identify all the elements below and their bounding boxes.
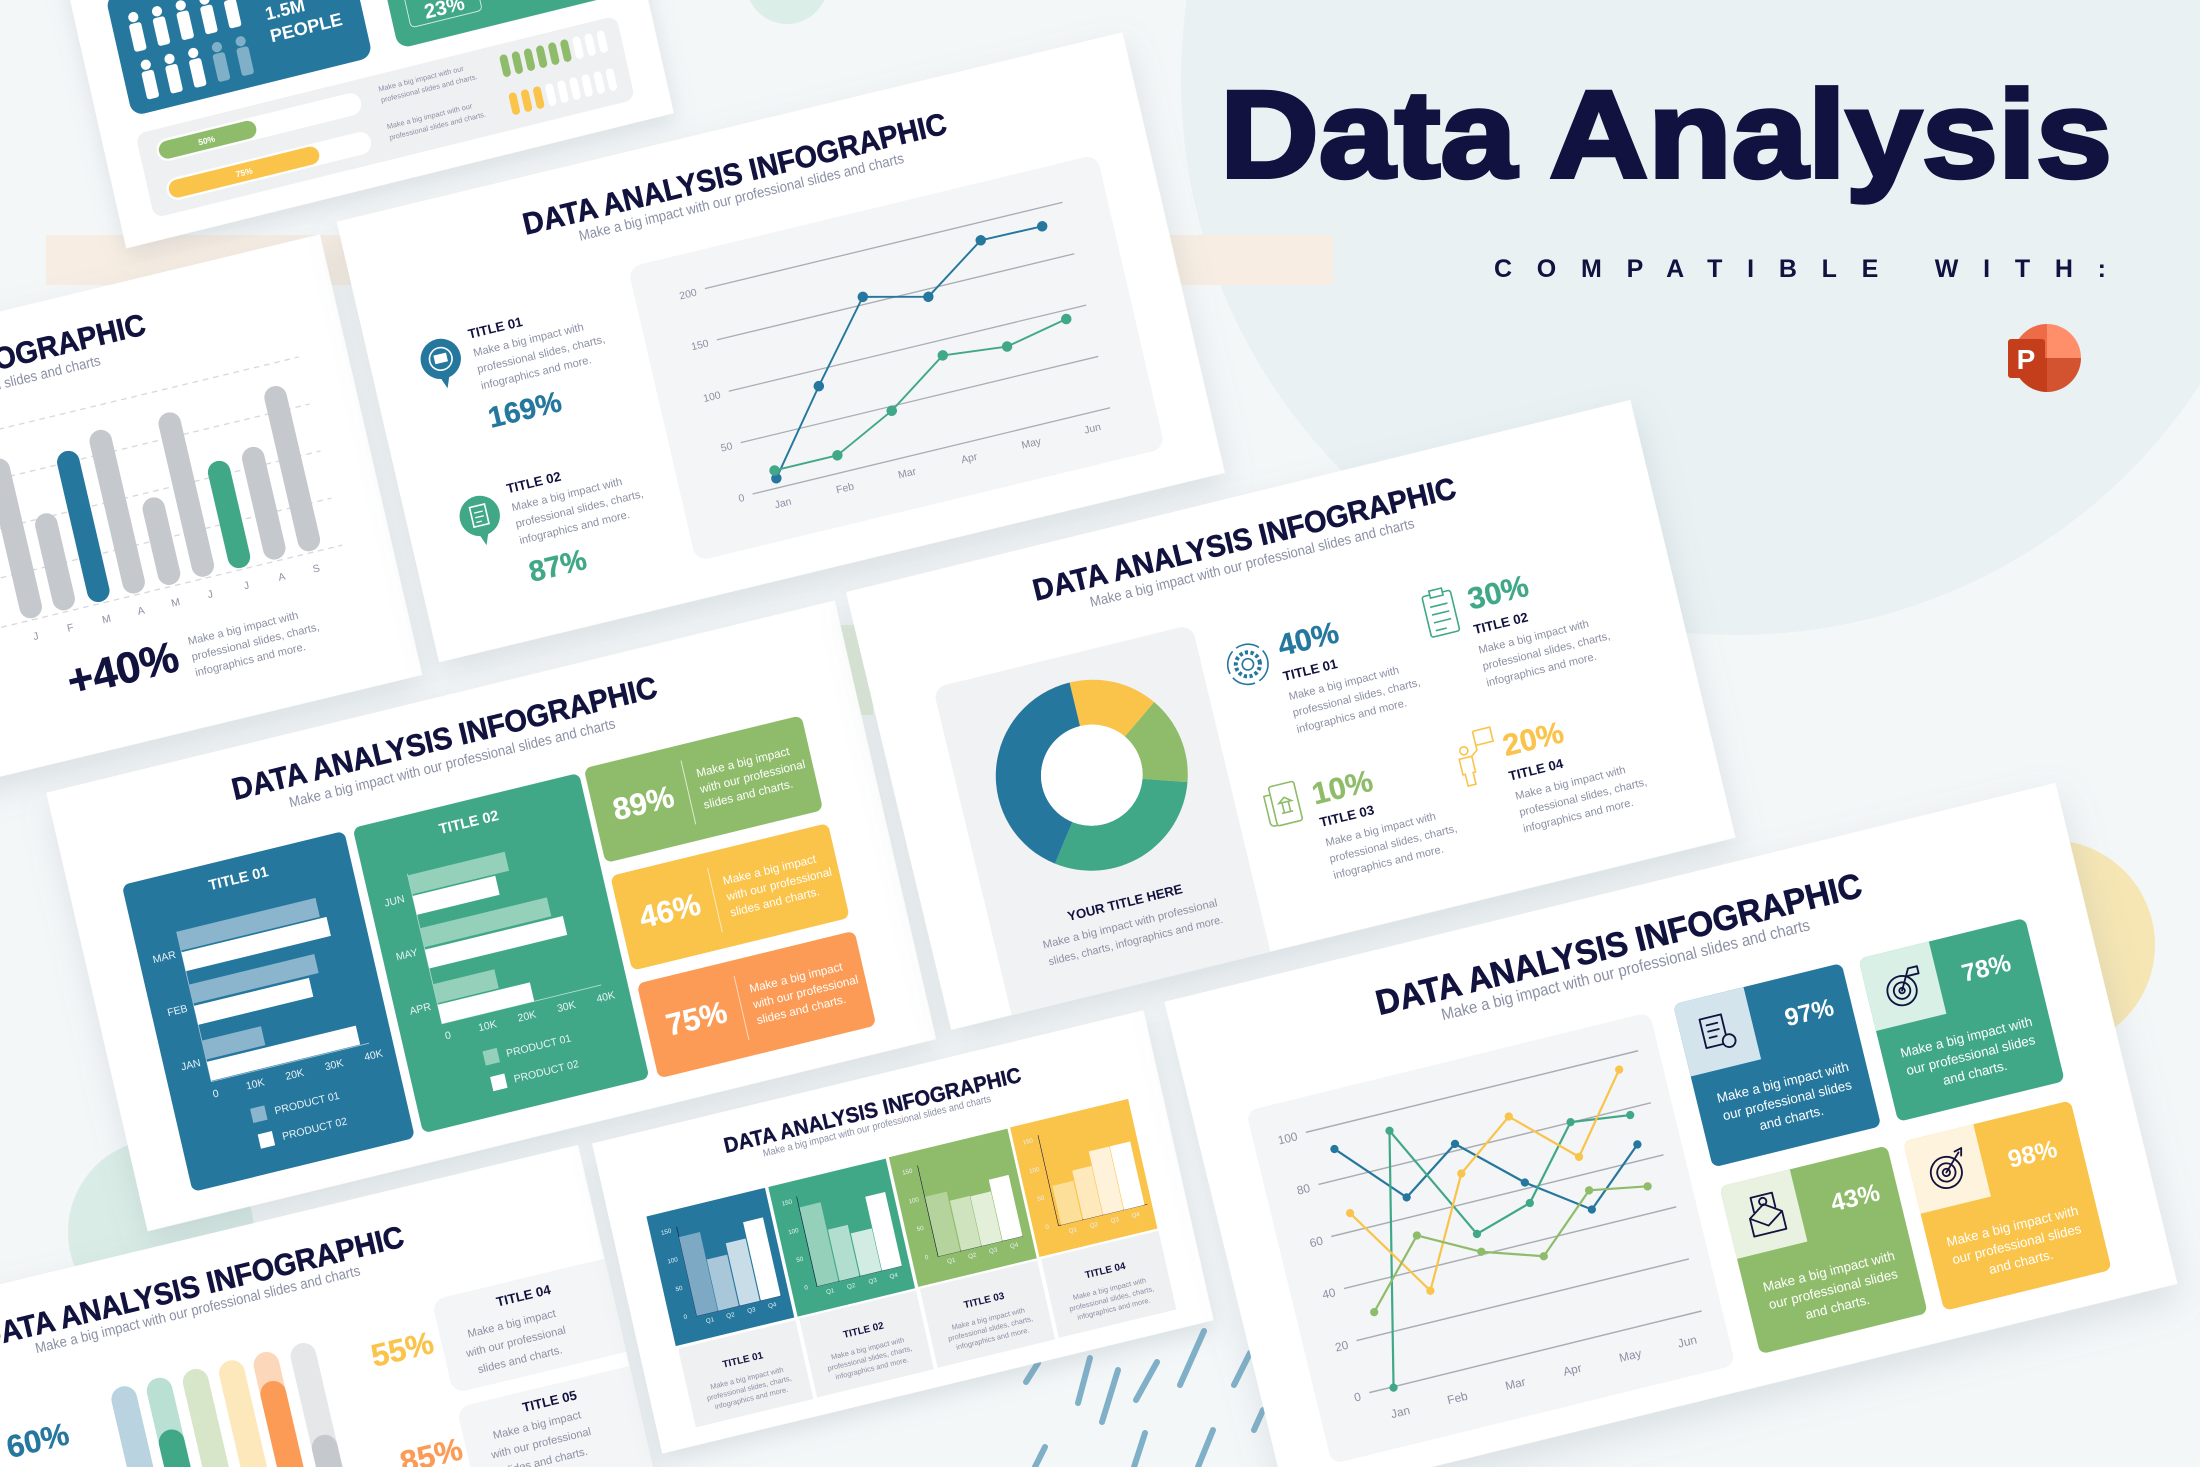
card: 46%: Make a big impact [722, 853, 818, 888]
item: 30% [1463, 553, 1615, 689]
cell: title 02: infographics and more. [835, 1355, 910, 1381]
panel: yellow chart: 0 [1045, 1223, 1050, 1231]
line chart: Mar [897, 466, 918, 481]
card: 75%: with our professional [751, 973, 860, 1012]
text: title 01: infographics and more. [480, 354, 593, 392]
panel: title 02 chart: 20K [516, 1009, 537, 1025]
item: 40%: Make a big impact with [1288, 665, 1400, 703]
panel: people count: PEOPLE [268, 9, 344, 46]
item: 10%: infographics and more. [1332, 843, 1445, 882]
panel: title 01 chart: 20K [284, 1067, 305, 1083]
people icons [126, 0, 254, 100]
icon: mail [1745, 1191, 1786, 1237]
series: green [750, 313, 1090, 477]
card: title 05: Make a big impact [492, 1409, 582, 1442]
card: 78%: and charts. [1941, 1058, 2009, 1088]
item: 40% [1272, 599, 1426, 736]
line chart: 0 [1353, 1389, 1363, 1405]
panel: title 02 chart: TITLE 02 [438, 808, 500, 838]
legend: PRODUCT 02 [513, 1058, 580, 1086]
panel: green chart: 150 [902, 1167, 914, 1177]
item: 40%: professional slides, charts, [1292, 677, 1422, 720]
cell: title 01: TITLE 01 [722, 1350, 765, 1371]
item: 10%: 10% [1309, 764, 1376, 811]
line chart: Jan [774, 497, 793, 511]
pale green band [835, 625, 873, 715]
text: title 01: 169% [485, 386, 565, 435]
line chart: 80 [1295, 1181, 1312, 1198]
item: 20%: Make a big impact with [1514, 764, 1627, 803]
item: 20%: infographics and more. [1522, 797, 1635, 835]
line chart: May [1021, 436, 1043, 452]
card: 75%: 75% [663, 994, 730, 1043]
card: 46% [610, 823, 850, 971]
panel: title 01 chart: 40K [363, 1048, 384, 1064]
legend: PRODUCT 01 [273, 1090, 341, 1117]
heading: Make a big impact with our professional slides and charts [577, 151, 906, 245]
card: 43%: and charts. [1804, 1292, 1871, 1322]
line chart [628, 154, 1165, 561]
bar chart: M [101, 614, 112, 626]
text: title 02 [505, 451, 658, 590]
panel: title 01 chart: 0 [212, 1088, 220, 1101]
pill meters [499, 30, 618, 116]
card: title 04: slides and charts. [477, 1344, 564, 1376]
slide: quarterly bar panels [592, 1010, 1214, 1454]
panel: teal chart: Q3 [868, 1277, 878, 1286]
panel: title 02 chart [353, 773, 649, 1133]
peach band [46, 235, 1333, 285]
bar chart: J [32, 631, 40, 643]
stat: 55%: 55% [368, 1325, 437, 1374]
line chart: Apr [1562, 1361, 1583, 1379]
card: 43%: 43% [1828, 1179, 1883, 1217]
card: title 05: with our professional [489, 1426, 592, 1462]
cell: title 04: Make a big impact with [1072, 1276, 1147, 1302]
item: 10%: Make a big impact with [1324, 811, 1437, 849]
bar chart: A [137, 606, 146, 618]
panel: progress: professional slides and charts. [380, 72, 478, 105]
card: 97% [1673, 963, 1881, 1167]
card: 89%: with our professional [698, 758, 807, 796]
line chart: 100 [702, 390, 722, 405]
blue dash pattern [1026, 1331, 1263, 1467]
cell: title 04: infographics and more. [1076, 1295, 1151, 1322]
panel: blue chart: Q1 [705, 1316, 715, 1325]
cell: title 02: TITLE 02 [842, 1320, 885, 1341]
card: 43%: Make a big impact with [1761, 1248, 1896, 1295]
card: title 04: Make a big impact [467, 1308, 557, 1341]
cell: title 01: professional slides, charts, [706, 1373, 792, 1403]
panel: progress: professional slides and charts. [388, 110, 487, 142]
heading: DATA ANALYSIS INFOGRAPHIC [722, 1063, 1023, 1158]
card: 78%: 78% [1959, 950, 2014, 988]
line chart: Apr [960, 452, 979, 466]
panel: donut: slides, charts, infographics and more. [1047, 914, 1224, 968]
cell: title 01: Make a big impact with [710, 1365, 784, 1391]
line chart: 200 [679, 288, 698, 302]
panel: donut: YOUR TITLE HERE [1066, 881, 1184, 924]
icon: PowerPoint: P [2017, 344, 2035, 375]
panel: blue chart: Q4 [768, 1301, 778, 1310]
item: 40%: TITLE 01 [1281, 656, 1339, 684]
line chart: Feb [1446, 1389, 1469, 1407]
text: title 01: professional slides, charts, [476, 334, 606, 376]
cell: title 03: infographics and more. [955, 1325, 1030, 1352]
card: title 04: with our professional [464, 1324, 567, 1360]
slide: horizontal bars and cards [46, 600, 936, 1231]
panel: progress [135, 16, 635, 218]
line chart: Jan [1389, 1403, 1411, 1421]
panel: blue chart: Q2 [726, 1311, 736, 1320]
heading: Make a big impact with our professional slides and charts [288, 716, 617, 811]
cell: title 03: Make a big impact with [951, 1305, 1026, 1332]
card: 89% [584, 715, 823, 863]
bar chart: J [207, 589, 214, 601]
cell: title 02 [799, 1290, 934, 1398]
panel: teal chart: Q2 [846, 1282, 857, 1291]
icon: blue pin [417, 335, 467, 393]
icon: green pin [456, 492, 506, 550]
panel: blue chart: 50 [675, 1285, 684, 1293]
panel: title 01 chart: 30K [324, 1057, 345, 1073]
item: 30%: 30% [1464, 569, 1532, 617]
card: 98%: Make a big impact with [1945, 1203, 2080, 1250]
legend: PRODUCT 02 [281, 1115, 349, 1143]
icon: clipboard [1421, 586, 1460, 637]
icon: person with flag [1454, 727, 1502, 787]
cell: title 02: Make a big impact with [830, 1335, 905, 1362]
item: 20%: professional slides, charts, [1518, 776, 1648, 819]
line chart: Mar [1504, 1375, 1527, 1393]
panel: title 01 chart: FEB [166, 1003, 189, 1019]
heading: DATA ANALYSIS INFOGRAPHIC [1030, 471, 1459, 608]
text: title 02: 87% [526, 544, 590, 589]
text: title 02: Make a big impact with [511, 476, 623, 514]
line chart: Feb [835, 481, 855, 496]
card: 98%: 98% [2005, 1136, 2060, 1174]
heading: Make a big impact with our professional slides and charts [762, 1094, 992, 1160]
bar chart: F [66, 623, 75, 635]
item: 20%: TITLE 04 [1507, 756, 1565, 784]
stat: +40%: +40% [63, 633, 183, 706]
panel: people count [105, 0, 373, 116]
panel: green chart: Q2 [967, 1252, 978, 1260]
slide: monthly capsule bars [0, 234, 422, 864]
panel: progress: Make a big impact with our [377, 64, 465, 94]
capsule chart [109, 1340, 382, 1467]
cell: title 03: TITLE 03 [963, 1291, 1006, 1311]
heading: Make a big impact with our professional slides and charts [1440, 916, 1812, 1024]
text: title 02: infographics and more. [518, 509, 631, 547]
line chart: 100 [1276, 1129, 1299, 1148]
series: blue [729, 219, 1090, 485]
panel: yellow chart: Q4 [1131, 1211, 1141, 1220]
panel: green chart: 0 [924, 1254, 930, 1262]
line chart: 20 [1334, 1338, 1350, 1355]
panel: donut: Make a big impact with professional [1042, 897, 1219, 951]
text: title 02: professional slides, charts, [514, 488, 645, 531]
panel: title 02 chart: 30K [556, 999, 577, 1015]
card: title 04: TITLE 04 [495, 1282, 553, 1310]
panel: yellow chart: Q1 [1068, 1226, 1078, 1235]
panel: green chart: 50 [916, 1225, 925, 1233]
card: 43%: our professional slides [1767, 1266, 1900, 1312]
panel: green chart: Q4 [1009, 1241, 1020, 1250]
heading: Make a big impact with our professional slides and charts [34, 1263, 362, 1357]
panel: teal chart: 50 [796, 1256, 805, 1264]
stat: 60%: 60% [3, 1416, 72, 1465]
panel: green chart: Q1 [947, 1257, 957, 1265]
subtitle: compatible with: COMPATIBLE WITH: [1494, 255, 2106, 283]
card: 46%: with our professional [724, 866, 833, 904]
icon: document clock [1700, 1012, 1737, 1053]
card: 43% [1719, 1145, 1928, 1354]
legend [250, 1087, 349, 1149]
panel: yellow chart: 100 [1029, 1166, 1041, 1175]
panel: title 01 chart [122, 831, 415, 1192]
card: 78%: our professional slides [1905, 1032, 2037, 1078]
card: 97%: our professional slides [1721, 1077, 1853, 1123]
panel: title 02 chart: MAY [395, 947, 419, 963]
item: 10% [1309, 747, 1462, 882]
card: title 05 [457, 1366, 653, 1467]
panel: title 02 chart: APR [408, 1001, 433, 1018]
panel: progress: 75% [235, 165, 254, 179]
card: 97%: 97% [1782, 994, 1837, 1032]
card: 78%: Make a big impact with [1899, 1014, 2034, 1061]
item: 20% [1498, 699, 1652, 836]
panel: title 01 chart: 10K [245, 1076, 266, 1093]
panel: yellow chart: Q2 [1089, 1221, 1099, 1230]
card: 98%: and charts. [1987, 1247, 2055, 1277]
text block: Make a big impact with [187, 610, 300, 648]
series: teal [1329, 1069, 1685, 1393]
line chart: 40 [1321, 1285, 1337, 1302]
card: 46%: 46% [636, 886, 704, 935]
series: yellow [1327, 1065, 1664, 1310]
bar chart: S [312, 563, 321, 576]
card: 75%: Make a big impact [748, 960, 845, 996]
panel: green chart [889, 1129, 1037, 1287]
item: 20%: 20% [1500, 715, 1567, 763]
bar chart: A [277, 572, 287, 584]
panel: yellow chart: 150 [1022, 1137, 1034, 1147]
panel: yellow chart: Q3 [1110, 1216, 1120, 1225]
panel: teal chart: 0 [804, 1284, 809, 1292]
card: 89%: 89% [609, 779, 677, 827]
panel: teal chart: Q4 [889, 1272, 899, 1281]
panel: progress: 50% [197, 133, 216, 147]
text: title 01: Make a big impact with [472, 321, 585, 360]
item: 30%: infographics and more. [1485, 651, 1598, 689]
slide: multi-line chart and cards [1164, 783, 2177, 1467]
panel: 23 percent [372, 0, 616, 49]
panel: blue chart [646, 1188, 794, 1346]
item: 30%: professional slides, charts, [1481, 630, 1611, 673]
heading: DATA ANALYSIS INFOGRAPHIC [1372, 866, 1866, 1023]
icon: gear [1224, 640, 1272, 689]
panel: title 01 chart: TITLE 01 [207, 864, 270, 894]
item: 40%: infographics and more. [1296, 697, 1408, 736]
card: 98%: our professional slides [1951, 1221, 2083, 1267]
panel: teal chart: Q1 [825, 1287, 836, 1296]
cell: title 04: professional slides, charts, [1068, 1284, 1155, 1313]
icon: bullseye [1926, 1148, 1970, 1191]
line chart: 0 [738, 493, 746, 505]
line chart [1246, 1012, 1736, 1464]
icon: PowerPoint [2008, 324, 2081, 392]
icon: target flag [1883, 966, 1925, 1008]
panel: blue chart: 0 [683, 1313, 688, 1321]
item: 30%: TITLE 02 [1472, 609, 1529, 637]
cell: title 01: infographics and more. [714, 1385, 789, 1411]
line chart: 60 [1308, 1233, 1325, 1250]
line chart: Jun [1083, 422, 1102, 437]
panel: donut [933, 624, 1270, 1015]
slide: donut chart [846, 400, 1736, 1030]
panel: title 01 chart: JAN [180, 1057, 202, 1073]
cell: title 04 [1041, 1231, 1176, 1338]
yellow circle right [1945, 840, 2155, 1050]
card: title 04 [432, 1259, 626, 1394]
panel: blue chart: 150 [660, 1228, 673, 1237]
mint circle bottom left [68, 1139, 254, 1325]
bar chart: M [170, 597, 181, 610]
panel: green chart: Q3 [988, 1246, 999, 1255]
panel: blue chart: Q3 [747, 1306, 757, 1315]
card: title 05: TITLE 05 [521, 1387, 579, 1415]
panel: teal chart: 150 [781, 1198, 793, 1208]
card: 89%: slides and charts. [702, 777, 794, 812]
heading: DATA ANALYSIS INFOGRAPHIC [228, 669, 660, 807]
main title: Data Analysis [1220, 66, 2112, 204]
cell: title 03 [920, 1260, 1055, 1368]
text: title 02: TITLE 02 [505, 469, 562, 496]
heading: Make a big impact with our professional slides and charts [1088, 516, 1416, 611]
panel: title 02 chart: 10K [477, 1018, 498, 1034]
mint circle top [746, 0, 828, 24]
cell: title 04: TITLE 04 [1084, 1261, 1127, 1281]
panel: title 02 chart: 0 [444, 1029, 452, 1042]
text: title 01 [467, 296, 620, 435]
text block: professional slides, charts, [190, 621, 321, 664]
panel: progress: Make a big impact with our [386, 101, 474, 131]
line chart: 150 [690, 339, 710, 353]
line chart: 50 [720, 441, 734, 455]
icon: bank document [1262, 781, 1303, 828]
cell: title 03: professional slides, charts, [947, 1314, 1034, 1343]
card: 89%: Make a big impact [695, 745, 792, 780]
slide: line chart with two titles [337, 32, 1225, 662]
card: 97%: Make a big impact with [1715, 1059, 1850, 1106]
item: 10%: TITLE 03 [1318, 802, 1376, 830]
cell: title 01 [678, 1320, 813, 1427]
slide: people statistics [56, 0, 674, 248]
panel: title 02 chart: JUN [383, 893, 406, 910]
card: 98% [1903, 1100, 2112, 1311]
background circle [1181, 0, 2200, 635]
item: 10%: professional slides, charts, [1328, 823, 1458, 866]
series: light green [1353, 1172, 1666, 1317]
heading: DATA ANALYSIS INFOGRAPHIC [520, 107, 950, 242]
slide: progress capsules [0, 1145, 680, 1467]
text block [187, 606, 324, 679]
panel: blue chart: 100 [667, 1256, 679, 1266]
panel: title 01 chart: MAR [152, 949, 177, 966]
panel: teal chart [768, 1159, 915, 1317]
bar chart: J [243, 580, 250, 592]
bar chart [0, 357, 348, 655]
panel: yellow chart: 50 [1037, 1194, 1045, 1203]
card: 78% [1858, 918, 2065, 1122]
line chart: Jun [1676, 1332, 1698, 1351]
panel: title 02 chart: 40K [595, 989, 616, 1005]
text block: infographics and more. [194, 641, 307, 679]
legend [483, 1030, 580, 1092]
card: 75% [637, 931, 876, 1078]
card: 97%: and charts. [1758, 1103, 1825, 1133]
card: 46%: slides and charts. [729, 885, 821, 919]
text: title 01: TITLE 01 [467, 314, 525, 342]
item: 30%: Make a big impact with [1477, 618, 1590, 657]
panel: yellow chart [1010, 1099, 1157, 1257]
panel: teal chart: 100 [788, 1227, 800, 1236]
card: 75%: slides and charts. [756, 993, 847, 1027]
series: blue [1329, 1073, 1655, 1271]
donut chart [976, 660, 1207, 891]
item: 40%: 40% [1275, 616, 1342, 663]
cell: title 02: professional slides, charts, [827, 1344, 913, 1373]
legend: PRODUCT 01 [505, 1032, 573, 1060]
panel: green chart: 100 [908, 1196, 920, 1206]
line chart: May [1618, 1346, 1643, 1365]
